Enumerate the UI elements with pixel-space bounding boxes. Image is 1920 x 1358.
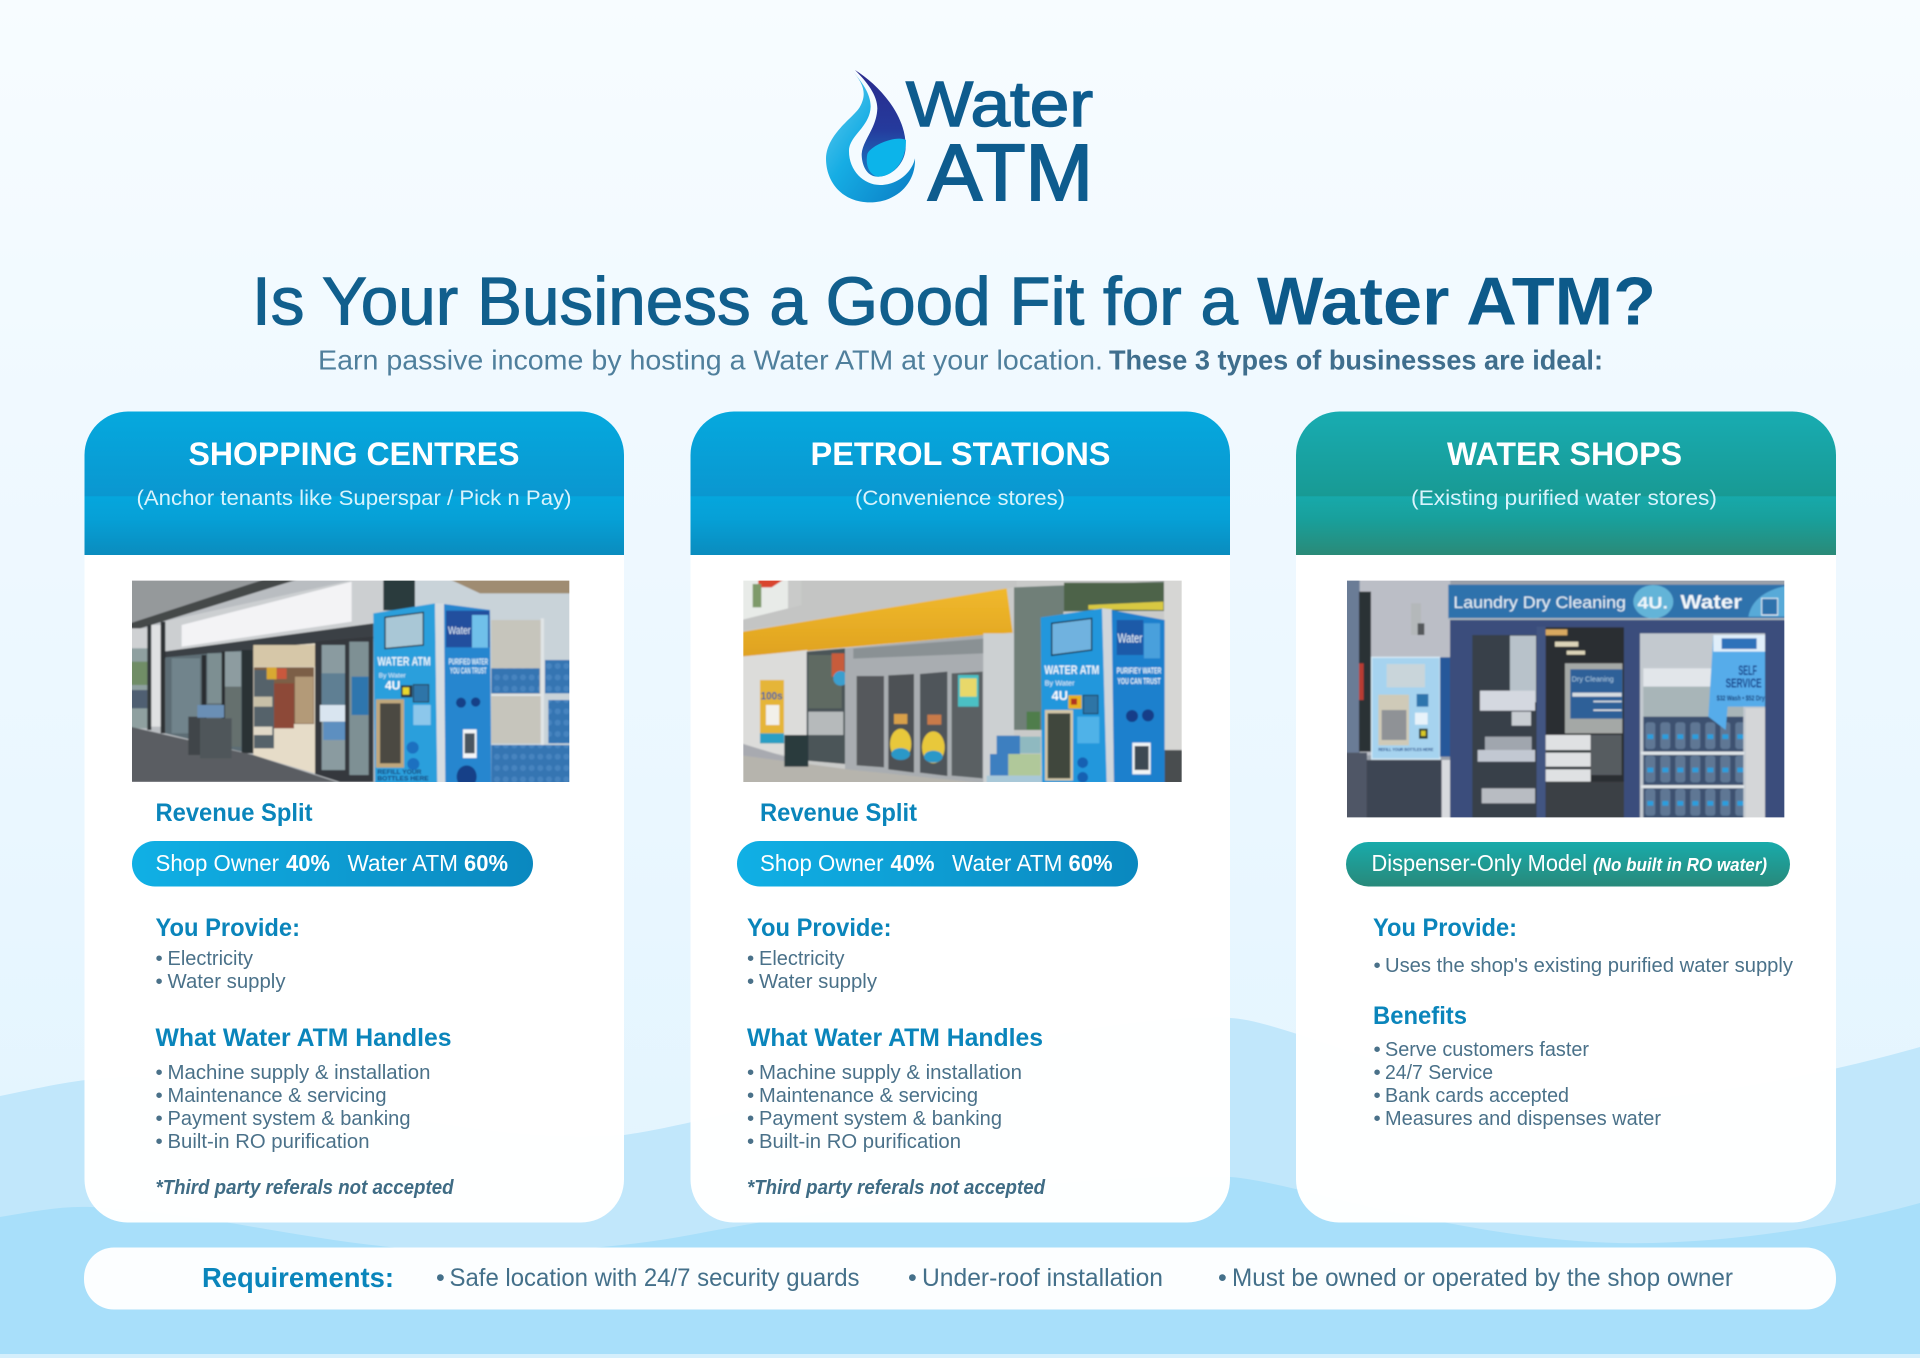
photo: shopping centre storefront with Water ATM: Water bbox=[448, 625, 471, 637]
subtitle bbox=[318, 344, 1603, 376]
photo: water shop with dispenser: 4U. bbox=[1637, 594, 1668, 613]
what water atm handles: Built-in RO purification bbox=[759, 1130, 961, 1153]
header: water shops: (Existing purified water stores) bbox=[1411, 486, 1717, 510]
subtitle: These 3 types of businesses are ideal: bbox=[1109, 344, 1603, 376]
you provide bbox=[1373, 914, 1794, 977]
you provide: Uses the shop's existing purified water supply bbox=[1385, 954, 1794, 977]
you provide: • bbox=[156, 947, 163, 970]
you provide: Water supply bbox=[759, 970, 878, 993]
benefits: Measures and dispenses water bbox=[1385, 1107, 1661, 1130]
revenue split pill: 60% bbox=[1068, 850, 1112, 876]
you provide: • bbox=[156, 970, 163, 993]
revenue split pill: 40% bbox=[286, 850, 330, 876]
photo: shopping centre storefront with Water ATM: PURIFIED WATER bbox=[449, 657, 488, 666]
requirement items: Under-roof installation bbox=[922, 1264, 1163, 1292]
photo: shopping centre storefront with Water ATM: REFILL YOUR bbox=[377, 769, 422, 776]
logo: Water ATM bbox=[826, 68, 1093, 217]
benefits: 24/7 Service bbox=[1385, 1061, 1493, 1084]
requirement items bbox=[436, 1264, 1733, 1292]
revenue split pill bbox=[737, 841, 1138, 886]
you provide bbox=[747, 914, 892, 993]
what water atm handles: What Water ATM Handles bbox=[747, 1024, 1043, 1052]
what water atm handles: • bbox=[156, 1061, 163, 1084]
photo: petrol station with Water ATM: 4U bbox=[1052, 689, 1068, 703]
you provide bbox=[156, 914, 300, 993]
logo text: Water bbox=[906, 68, 1093, 140]
panel: petrol stations bbox=[690, 412, 1230, 1222]
what water atm handles: • bbox=[156, 1084, 163, 1107]
what water atm handles: Built-in RO purification bbox=[168, 1130, 370, 1153]
revenue split heading: Revenue Split bbox=[760, 799, 918, 827]
photo: petrol station with Water ATM: Water bbox=[1118, 632, 1142, 646]
requirement items: • bbox=[436, 1264, 445, 1292]
benefits: • bbox=[1374, 1107, 1381, 1130]
model pill: (No built in RO water) bbox=[1593, 855, 1767, 875]
what water atm handles: • bbox=[156, 1130, 163, 1153]
benefits: Bank cards accepted bbox=[1385, 1084, 1569, 1107]
model pill bbox=[1346, 842, 1790, 886]
what water atm handles: Machine supply & installation bbox=[168, 1061, 430, 1084]
what water atm handles: Payment system & banking bbox=[168, 1107, 410, 1130]
what water atm handles bbox=[747, 1024, 1043, 1153]
you provide: Water supply bbox=[168, 970, 286, 993]
panel: water shops bbox=[1296, 412, 1836, 1222]
photo: petrol station with Water ATM: PURIFIEY WATER bbox=[1117, 665, 1162, 675]
title: Water ATM? bbox=[1257, 264, 1656, 340]
panel: shopping centres bbox=[84, 412, 624, 1222]
header: petrol stations: (Convenience stores) bbox=[855, 486, 1065, 510]
requirements bar bbox=[84, 1248, 1836, 1310]
header: water shops bbox=[1296, 412, 1836, 555]
revenue split pill: Shop Owner bbox=[156, 850, 279, 876]
photo: shopping centre storefront with Water ATM: By Water bbox=[379, 672, 407, 679]
you provide: Electricity bbox=[168, 947, 254, 970]
logo text: ATM bbox=[928, 128, 1093, 217]
you provide: You Provide: bbox=[1373, 914, 1517, 942]
subtitle: Earn passive income by hosting a Water ATM at your location. bbox=[318, 344, 1103, 376]
photo: shopping centre storefront with Water ATM bbox=[130, 579, 572, 788]
revenue split pill: Shop Owner bbox=[760, 850, 884, 876]
header: shopping centres: SHOPPING CENTRES bbox=[188, 436, 520, 472]
revenue split pill: 40% bbox=[890, 850, 934, 876]
photo: water shop with dispenser bbox=[1345, 579, 1788, 820]
what water atm handles: Maintenance & servicing bbox=[168, 1084, 386, 1107]
what water atm handles: Machine supply & installation bbox=[759, 1061, 1022, 1084]
you provide: Electricity bbox=[759, 947, 845, 970]
revenue split pill bbox=[132, 841, 533, 886]
requirement items: • bbox=[908, 1264, 917, 1292]
icon: water drop bbox=[826, 70, 915, 202]
what water atm handles: • bbox=[747, 1084, 754, 1107]
requirement items: • bbox=[1218, 1264, 1227, 1292]
benefits: Serve customers faster bbox=[1385, 1038, 1589, 1061]
photo: petrol station with Water ATM: YOU CAN TRUST bbox=[1117, 676, 1161, 686]
benefits: • bbox=[1374, 1061, 1381, 1084]
photo: petrol station with Water ATM: By Water bbox=[1045, 679, 1075, 688]
photo: shopping centre storefront with Water ATM: 4U bbox=[385, 678, 400, 692]
revenue split pill: Water ATM bbox=[348, 850, 458, 876]
what water atm handles: • bbox=[747, 1107, 754, 1130]
you provide: • bbox=[747, 970, 754, 993]
photo: water shop with dispenser: SERVICE bbox=[1726, 676, 1762, 690]
photo: shopping centre storefront with Water ATM: YOU CAN TRUST bbox=[450, 666, 487, 675]
header: petrol stations bbox=[690, 412, 1230, 555]
photo: petrol station with Water ATM: WATER ATM bbox=[1044, 663, 1099, 677]
you provide: You Provide: bbox=[156, 914, 300, 942]
what water atm handles: Payment system & banking bbox=[759, 1107, 1002, 1130]
benefits: • bbox=[1374, 1038, 1381, 1061]
photo: water shop with dispenser: REFILL YOUR BOTTLES HERE bbox=[1378, 747, 1433, 752]
you provide: • bbox=[1374, 954, 1381, 977]
you provide: You Provide: bbox=[747, 914, 892, 942]
photo: water shop with dispenser: SELF bbox=[1738, 662, 1757, 678]
model pill: Dispenser-Only Model bbox=[1372, 850, 1587, 876]
photo: shopping centre storefront with Water ATM: BOTTLES HERE bbox=[377, 776, 429, 783]
header: shopping centres bbox=[84, 412, 624, 555]
what water atm handles: • bbox=[747, 1130, 754, 1153]
header: water shops: WATER SHOPS bbox=[1447, 436, 1682, 472]
title: Is Your Business a Good Fit for a bbox=[252, 264, 1238, 340]
note: third party: *Third party referals not accepted bbox=[156, 1177, 454, 1199]
revenue split heading: Revenue Split bbox=[156, 799, 313, 827]
photo: water shop with dispenser: Dry Cleaning bbox=[1572, 675, 1614, 684]
you provide: • bbox=[747, 947, 754, 970]
header: shopping centres: (Anchor tenants like Superspar / Pick n Pay) bbox=[136, 486, 572, 510]
what water atm handles bbox=[156, 1024, 452, 1153]
requirement items: Must be owned or operated by the shop owner bbox=[1232, 1264, 1733, 1292]
photo: water shop with dispenser: $32 Wash • $52 Dry bbox=[1717, 694, 1765, 703]
photo: shopping centre storefront with Water ATM: WATER ATM bbox=[377, 655, 431, 668]
revenue split pill: 60% bbox=[464, 850, 508, 876]
benefits: • bbox=[1374, 1084, 1381, 1107]
photo: petrol station with Water ATM: 100s bbox=[761, 690, 783, 702]
photo: petrol station with Water ATM bbox=[741, 579, 1185, 784]
benefits bbox=[1373, 1002, 1661, 1130]
logo text bbox=[906, 68, 1093, 217]
what water atm handles: Maintenance & servicing bbox=[759, 1084, 978, 1107]
requirements label: Requirements: bbox=[202, 1262, 394, 1293]
photo: water shop with dispenser: Laundry Dry Cleaning bbox=[1453, 593, 1626, 612]
what water atm handles: • bbox=[747, 1061, 754, 1084]
benefits: Benefits bbox=[1373, 1002, 1467, 1030]
header: petrol stations: PETROL STATIONS bbox=[810, 436, 1110, 472]
what water atm handles: • bbox=[156, 1107, 163, 1130]
note: third party: *Third party referals not accepted bbox=[747, 1177, 1046, 1199]
revenue split pill: Water ATM bbox=[952, 850, 1062, 876]
what water atm handles: What Water ATM Handles bbox=[156, 1024, 452, 1052]
photo: water shop with dispenser: Water bbox=[1680, 593, 1743, 614]
requirement items: Safe location with 24/7 security guards bbox=[450, 1264, 860, 1292]
